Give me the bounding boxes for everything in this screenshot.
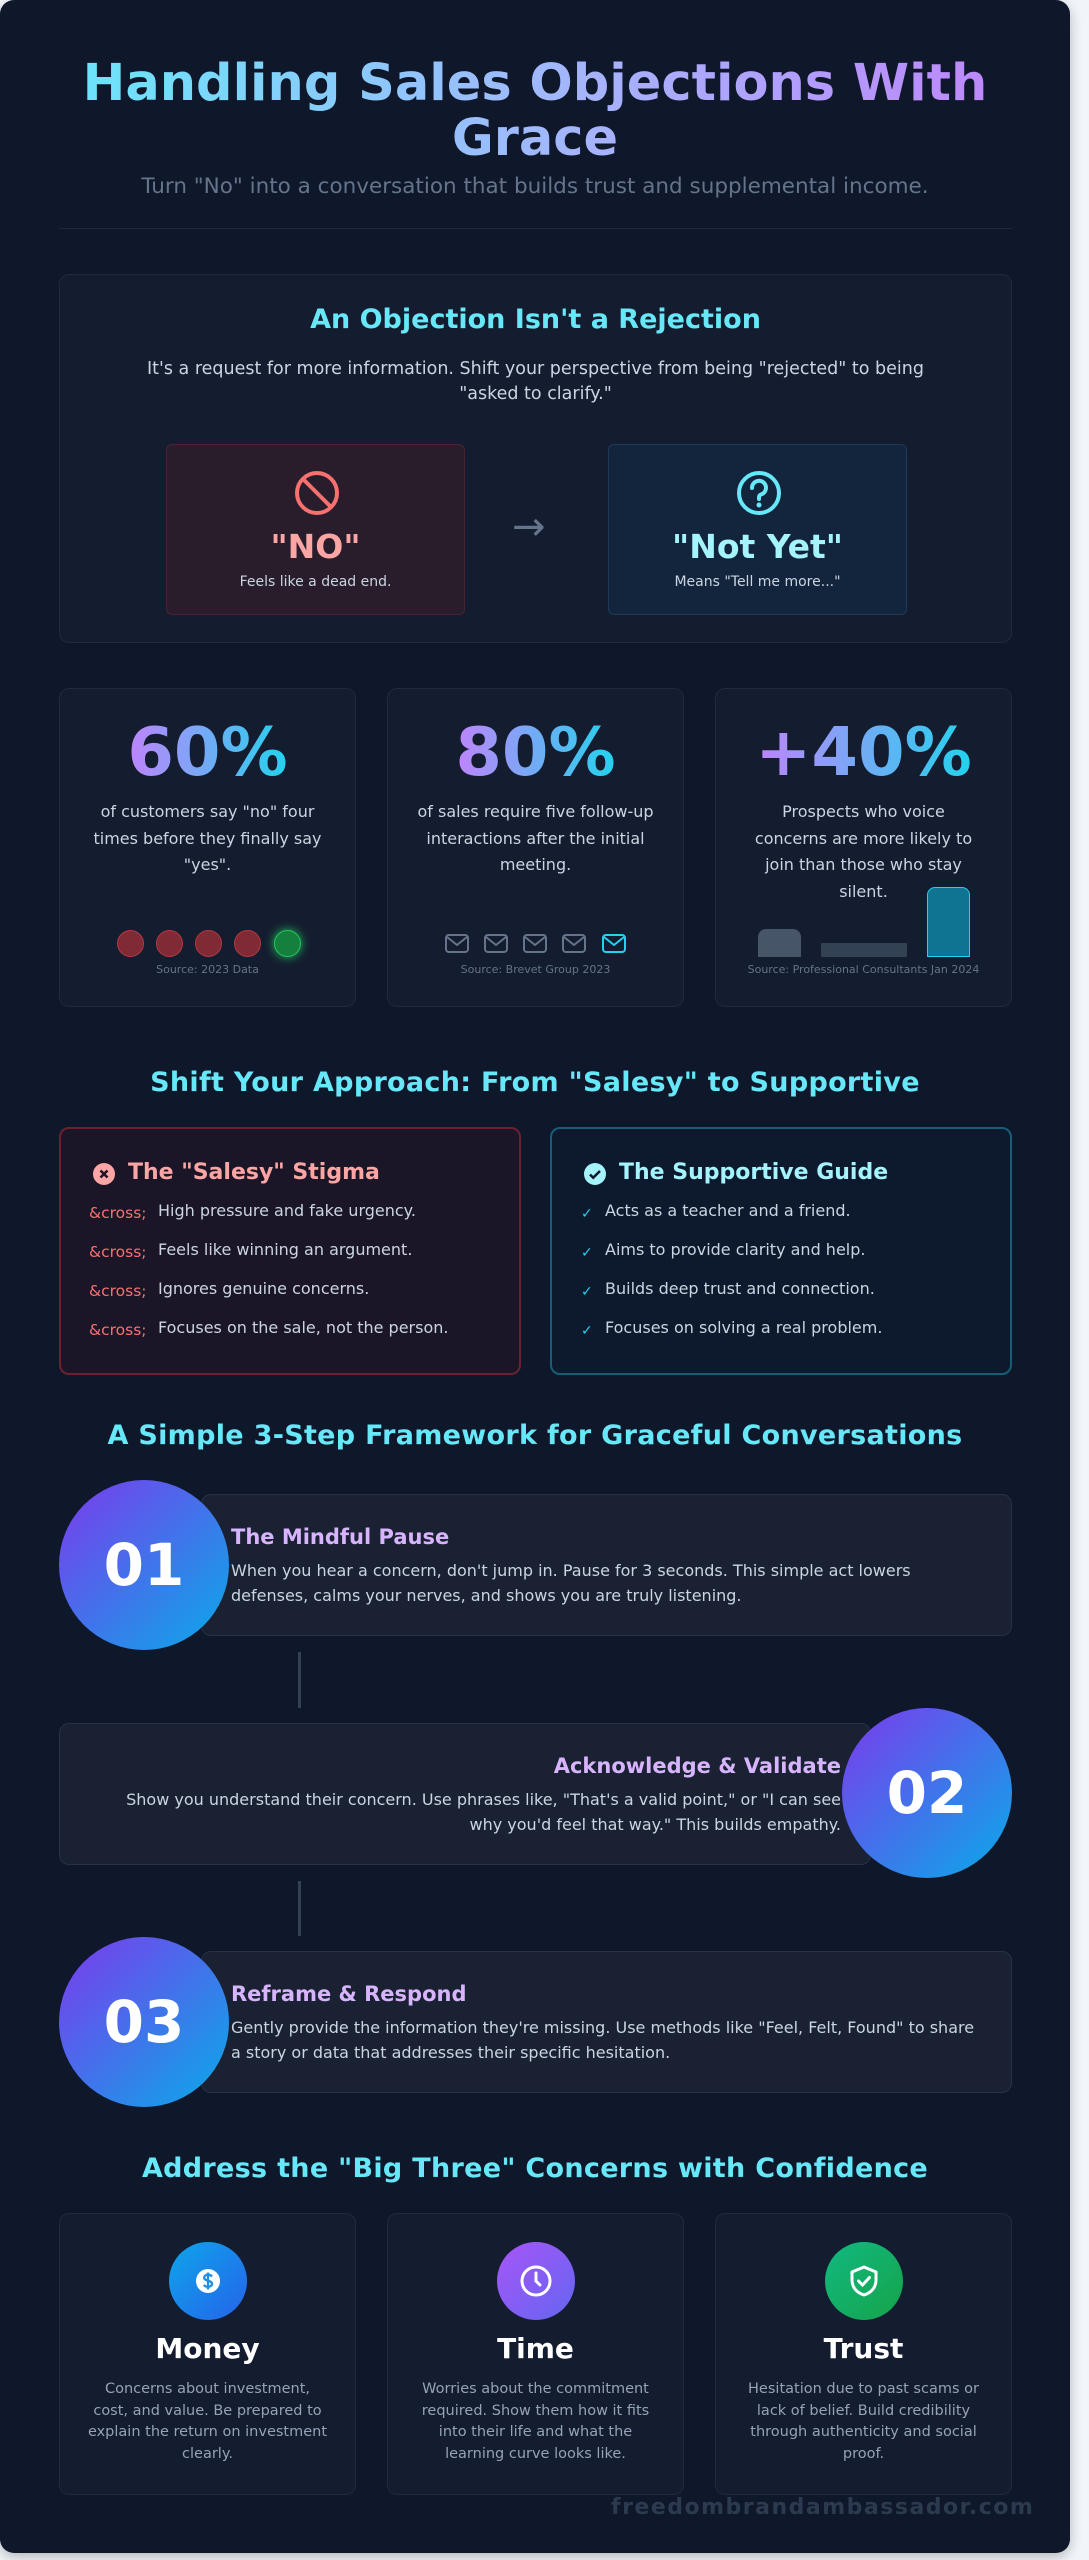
heading: shift approach: Shift Your Approach: From "Salesy" to Supportive: [150, 1067, 920, 1098]
panel: stat +40%: Prospects who voice: [782, 802, 945, 821]
panel: supportive guide: ✓: [581, 1206, 593, 1222]
heading: An Objection Isn't a Rejection: [310, 304, 761, 335]
box: NO: Feels like a dead end.: [240, 574, 391, 590]
box: Not Yet: Means "Tell me more...": [674, 574, 841, 590]
bar chart: [758, 887, 970, 957]
step 1: 01: [104, 1531, 184, 1599]
text block: [147, 359, 924, 404]
connector: [298, 1881, 301, 1936]
panel: trust: Hesitation due to past scams or: [748, 2381, 979, 2397]
panel: supportive guide: ✓: [581, 1245, 593, 1261]
panel: supportive guide: Aims to provide clarity and help.: [605, 1240, 865, 1259]
box: Not Yet: [608, 444, 907, 615]
panel: stat 80%: [387, 688, 684, 1007]
panel: supportive guide: Focuses on solving a real problem.: [605, 1318, 882, 1337]
panel: stat 80%: meeting.: [500, 855, 571, 874]
heading: framework: A Simple 3-Step Framework for Graceful Conversations: [107, 1420, 963, 1451]
panel: stat 60%: 60%: [127, 713, 288, 791]
panel: stat 80%: of sales require five follow-up: [417, 802, 654, 821]
step 3: a story or data that addresses their specific hesitation.: [231, 2043, 670, 2062]
icon: question: [737, 471, 781, 515]
panel: time: [387, 2213, 684, 2495]
panel: money: Money: [155, 2332, 260, 2365]
panel: stat +40%: [715, 688, 1012, 1007]
panel: time: learning curve looks like.: [445, 2446, 626, 2462]
step 2: Show you understand their concern. Use phrases like, "That's a valid point," or "I can see: [126, 1790, 841, 1809]
panel: supportive guide: ✓: [581, 1323, 593, 1339]
panel: stat +40%: silent.: [839, 882, 888, 900]
icon: clock: [497, 2242, 575, 2320]
panel: supportive guide: The Supportive Guide: [619, 1160, 888, 1185]
icon: prohibited: [295, 471, 339, 515]
panel: money: clearly.: [182, 2446, 233, 2462]
connector: [298, 1652, 301, 1708]
panel: supportive guide: Builds deep trust and connection.: [605, 1279, 875, 1298]
panel: time: required. Show them how it fits: [422, 2402, 649, 2418]
panel: stat 80%: interactions after the initial: [426, 828, 645, 848]
icon: dollar: [169, 2242, 247, 2320]
panel: stat 80%: Source: Brevet Group 2023: [461, 963, 610, 976]
panel: trust: [715, 2213, 1012, 2495]
heading: big three: Address the "Big Three" Concerns with Confidence: [142, 2153, 928, 2184]
icon: x circle: [93, 1163, 115, 1185]
step 3: 03: [104, 1988, 184, 2056]
panel: supportive guide: [550, 1127, 1012, 1375]
panel: trust: proof.: [843, 2446, 884, 2462]
step 3: Reframe & Respond: [231, 1982, 466, 2006]
panel: stat +40%: +40%: [755, 713, 972, 791]
panel: stat 80%: 80%: [455, 713, 616, 791]
panel: stat 60%: of customers say "no" four: [101, 802, 314, 821]
text block: It's a request for more information. Shift your perspective from being "rejected" to being: [147, 359, 924, 379]
icon: mails: [445, 934, 626, 953]
panel: money: explain the return on investment: [88, 2424, 327, 2440]
panel: time: into their life and what the: [439, 2424, 632, 2440]
panel: stat 60%: [59, 688, 356, 1007]
panel: supportive guide: Acts as a teacher and a friend.: [605, 1201, 851, 1220]
panel: stat 60%: "yes".: [184, 855, 231, 874]
step 1: defenses, calms your nerves, and shows you are truly listening.: [231, 1586, 742, 1605]
panel: stat +40%: join than those who stay: [765, 855, 962, 874]
panel: salesy stigma: High pressure and fake urgency.: [158, 1201, 416, 1220]
panel: salesy stigma: [59, 1127, 521, 1375]
panel: stat +40%: concerns are more likely to: [755, 828, 972, 848]
panel: salesy stigma: &cross;: [89, 1321, 146, 1339]
arrow: →: [512, 504, 546, 550]
panel: salesy stigma: The "Salesy" Stigma: [128, 1160, 380, 1185]
panel: stat +40%: Source: Professional Consultants Jan 2024: [748, 963, 979, 976]
panel: salesy stigma: &cross;: [89, 1204, 146, 1222]
panel: salesy stigma: Ignores genuine concerns.: [158, 1279, 369, 1298]
box: NO: "NO": [270, 527, 361, 566]
step 1: The Mindful Pause: [231, 1525, 449, 1549]
box: Not Yet: "Not Yet": [672, 527, 843, 566]
text block: "asked to clarify.": [459, 384, 612, 404]
icon: dots: [117, 923, 308, 964]
panel: salesy stigma: Focuses on the sale, not the person.: [158, 1318, 448, 1337]
panel: trust: Trust: [824, 2332, 903, 2365]
step 3: Gently provide the information they're missing. Use methods like "Feel, Felt, Found" to share: [231, 2018, 974, 2037]
step 2: [59, 1708, 1012, 1878]
icon: shield: [825, 2242, 903, 2320]
watermark: freedombrandambassador.com: [611, 2495, 1034, 2520]
panel: salesy stigma: &cross;: [89, 1282, 146, 1300]
panel: supportive guide: ✓: [581, 1284, 593, 1300]
panel: money: Concerns about investment,: [105, 2381, 310, 2397]
step 2: why you'd feel that way." This builds empathy.: [470, 1815, 841, 1834]
subtitle: Turn "No" into a conversation that builds trust and supplemental income.: [141, 174, 929, 199]
panel: time: Time: [497, 2332, 574, 2365]
panel: time: Worries about the commitment: [422, 2381, 649, 2397]
panel: trust: through authenticity and social: [750, 2424, 977, 2440]
panel: salesy stigma: &cross;: [89, 1243, 146, 1261]
panel: trust: lack of belief. Build credibility: [757, 2402, 970, 2418]
panel: salesy stigma: Feels like winning an argument.: [158, 1240, 412, 1259]
step 2: Acknowledge & Validate: [554, 1754, 841, 1778]
panel: money: [59, 2213, 356, 2495]
step 2: 02: [887, 1759, 967, 1827]
box: NO: [166, 444, 465, 615]
panel: stat 60%: Source: 2023 Data: [156, 963, 259, 976]
step 1: When you hear a concern, don't jump in. Pause for 3 seconds. This simple act lowers: [231, 1561, 911, 1580]
step 3: [59, 1937, 1012, 2107]
panel: money: cost, and value. Be prepared to: [93, 2402, 322, 2418]
icon: check circle: [584, 1163, 606, 1185]
title: Handling Sales Objections With Grace: [83, 54, 987, 168]
step 1: [59, 1480, 1012, 1650]
panel: objection isn't rejection: [59, 274, 1012, 643]
panel: stat 60%: times before they finally say: [93, 828, 322, 848]
